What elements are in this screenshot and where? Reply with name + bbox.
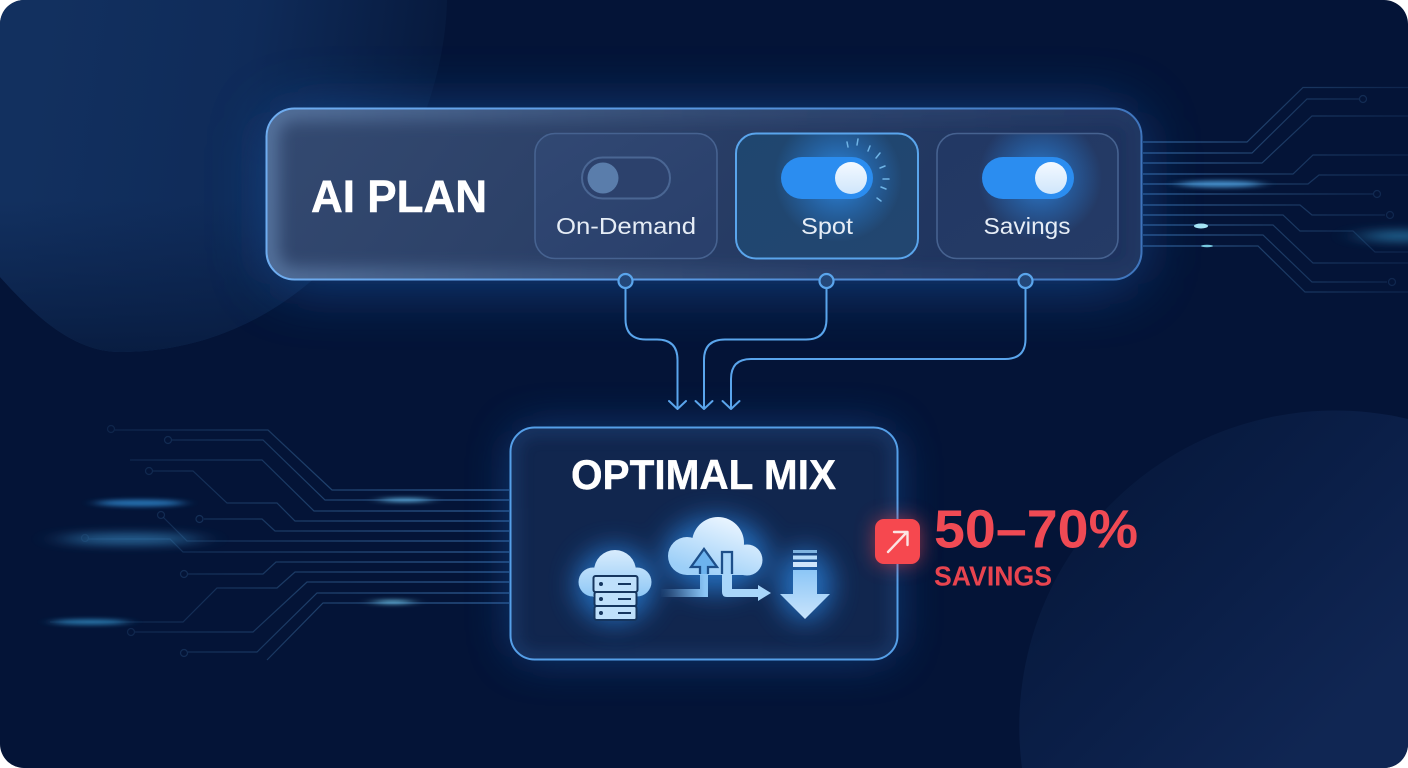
panel: AI plan: [266, 108, 1142, 280]
node: On-Demand: [618, 274, 632, 288]
circuit traces: right: [1143, 88, 1408, 292]
icon: red arrow badge: [875, 519, 920, 564]
heading: AI PLAN: AI PLAN: [311, 171, 487, 222]
node: Savings: [1018, 274, 1032, 288]
stat: 50–70%: 50–70%: [934, 500, 1138, 560]
light streaks: [52, 180, 1408, 625]
icon: cloud server: [578, 550, 652, 620]
label: On-Demand: On-Demand: [556, 213, 696, 239]
icon: cloud with arrows: [661, 517, 771, 601]
panel glow: [270, 112, 1138, 658]
node: Spot: [820, 274, 834, 288]
icon: down arrow: [780, 550, 830, 619]
label: Savings: Savings: [984, 213, 1070, 239]
card: On-Demand: [535, 134, 717, 258]
savings callout: [875, 500, 1138, 592]
label: Spot: Spot: [801, 213, 854, 239]
connector: Spot: [696, 288, 826, 409]
connector: Savings: [722, 288, 1026, 409]
label: SAVINGS: SAVINGS: [934, 560, 1052, 592]
circuit traces: left: [50, 426, 509, 660]
toggle: on with sparkle: [781, 139, 889, 201]
toggle: off: [582, 158, 670, 198]
panel: Optimal Mix: [510, 428, 898, 660]
icons glow: [575, 517, 833, 623]
heading: OPTIMAL MIX: OPTIMAL MIX: [571, 451, 836, 498]
connectors from toggles to optimal mix: [618, 274, 1032, 409]
card: Savings: [937, 116, 1118, 258]
card: Spot: [735, 132, 919, 260]
connector: On-Demand: [626, 288, 686, 409]
toggle: on: [982, 157, 1074, 199]
